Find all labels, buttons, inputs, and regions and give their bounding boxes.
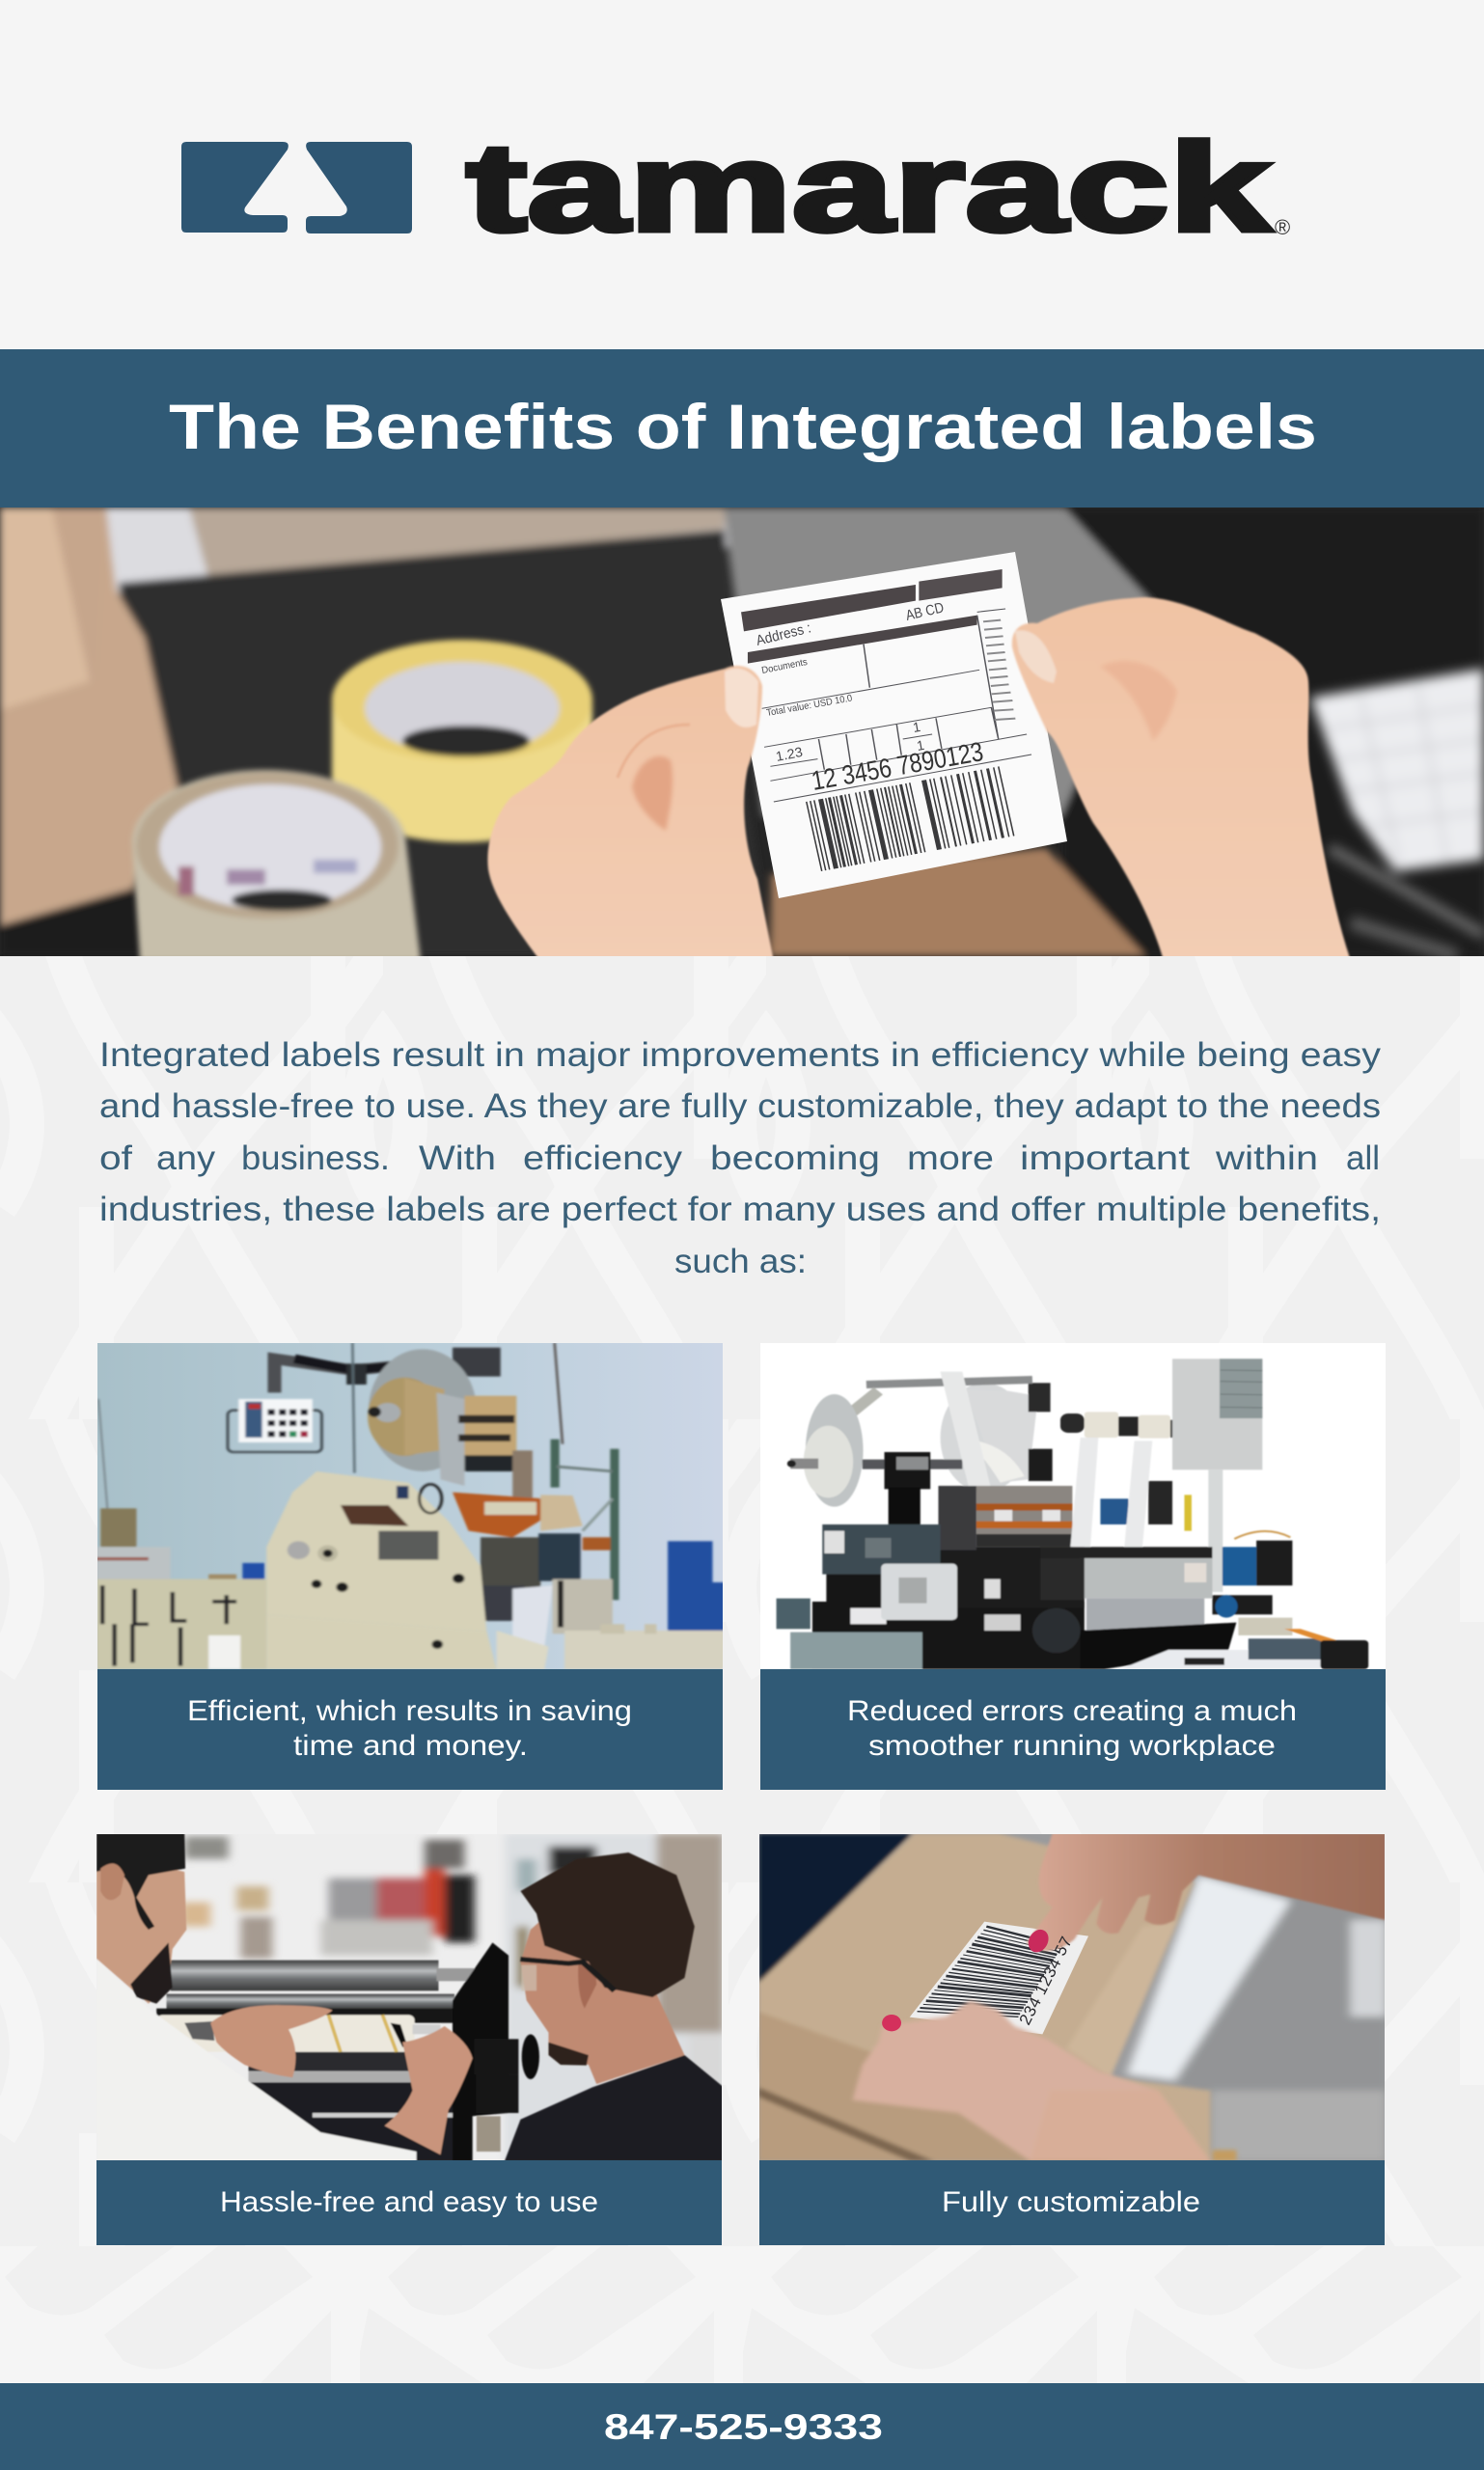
top bar: [866, 1380, 1032, 1385]
wordmark: tamarack: [466, 117, 1272, 258]
caption bar: [97, 1669, 723, 1790]
intro paragraph: within: [1215, 1139, 1318, 1177]
intro paragraph: of: [99, 1139, 132, 1177]
caption text: time and money.: [293, 1730, 528, 1762]
intro paragraph: any: [156, 1139, 216, 1177]
intro paragraph: Integrated labels result in major improvements in efficiency while being easy: [99, 1036, 1382, 1074]
intro paragraph: With: [419, 1139, 496, 1177]
blurred keyboard: [1310, 669, 1484, 956]
upper arm and hand: [1027, 1833, 1386, 1951]
photo: label press in warehouse: [96, 1343, 725, 1669]
label text: 1: [916, 737, 925, 754]
icon: clear tape roll: [132, 770, 421, 961]
hero photo: hands holding shipping label: [0, 508, 1484, 961]
card: fully customizable: [758, 1833, 1390, 2245]
control panel: [228, 1411, 321, 1452]
label text: 1.23: [775, 744, 804, 764]
label text: AB CD: [904, 599, 946, 624]
intro paragraph: industries, these labels are perfect for many uses and offer multiple benefits,: [99, 1191, 1381, 1228]
barcode digits: 234 1234 57: [1016, 1934, 1076, 2028]
caption text: Fully customizable: [942, 2186, 1200, 2218]
card: efficient: [96, 1343, 725, 1790]
background pattern panel: [0, 956, 1484, 2383]
web strip: [941, 1372, 990, 1486]
bottom right: [1120, 1650, 1320, 1669]
label text: Address :: [755, 619, 812, 649]
photo: label converting machine: [760, 1343, 1386, 1669]
left hand: [487, 666, 774, 961]
title text: The Benefits of Integrated labels: [169, 391, 1317, 462]
intro paragraph: efficiency: [523, 1139, 683, 1177]
young man in black t-shirt: [520, 1913, 684, 2084]
caption text: Hassle-free and easy to use: [220, 2186, 598, 2218]
lower hand: [852, 2000, 1210, 2161]
touch screen: [881, 1564, 957, 1620]
center machinery: [481, 1537, 540, 1589]
barcode sticker: [910, 1922, 1088, 2034]
photo: hands applying barcode label to box: [758, 1833, 1390, 2161]
caption bar: [96, 2160, 722, 2245]
label text: Documents: [760, 657, 809, 676]
caption text: smoother running workplace: [868, 1730, 1276, 1762]
blurred desk background: [0, 508, 1484, 956]
intro paragraph: important: [1020, 1139, 1190, 1177]
icon: yellow tape roll: [332, 640, 592, 842]
intro paragraph: business.: [241, 1139, 390, 1177]
orange housing: [453, 1493, 544, 1537]
left disc: [806, 1394, 864, 1507]
intro paragraph: more: [907, 1139, 994, 1177]
black frame: [453, 1942, 508, 2161]
older man in white shirt: [96, 1959, 417, 2161]
blue cabinet: [668, 1541, 712, 1639]
intro paragraph: such as:: [674, 1243, 807, 1280]
cabinet: [1172, 1358, 1262, 1469]
icon: tamarack tree mark: [181, 142, 412, 233]
racks: [610, 1449, 618, 1600]
black base behind everything: [812, 1602, 1085, 1669]
gray box: [822, 1524, 941, 1575]
rollers: [171, 1961, 438, 1990]
caption text: Efficient, which results in saving: [187, 1695, 632, 1727]
intro paragraph: becoming: [710, 1139, 880, 1177]
intro paragraph: [99, 1036, 1382, 1280]
cream press body: [266, 1471, 486, 1631]
photo: two workers at laminating rollers: [96, 1833, 728, 2161]
logo: tamarack: [181, 117, 1290, 258]
roller housing: [1081, 1553, 1212, 1599]
label text: 1: [912, 719, 921, 735]
label text: Total value: USD 10.0: [766, 693, 854, 719]
caption text: Reduced errors creating a much: [847, 1695, 1297, 1727]
phone number: 847-525-9333: [604, 2407, 883, 2447]
rear disc: [940, 1384, 1010, 1487]
blurred workshop background: [180, 1833, 728, 2161]
card: hassle-free: [96, 1833, 728, 2245]
barcode: [806, 766, 1014, 871]
white roller: [156, 2015, 415, 2052]
left machines: [100, 1508, 136, 1547]
shipping label card: [721, 552, 1067, 898]
caption text: [187, 1695, 632, 1762]
card: reduced errors: [760, 1343, 1386, 1790]
title banner: [0, 349, 1484, 508]
motors: [1223, 1547, 1256, 1585]
paper web: [512, 1585, 553, 1647]
footer bar: [0, 2383, 1484, 2470]
intro paragraph: and hassle-free to use. As they are fully customizable, they adapt to the needs: [99, 1087, 1381, 1125]
spool assembly: [1060, 1413, 1085, 1433]
right hand: [1012, 597, 1351, 961]
mid rollers: [975, 1485, 1073, 1535]
label text: 12 3456 7890123: [810, 736, 985, 796]
registered mark: ®: [1275, 215, 1290, 239]
caption bar: [760, 1669, 1386, 1790]
roll and disc: [369, 1349, 477, 1471]
caption text: [847, 1695, 1297, 1762]
intro paragraph: all: [1346, 1139, 1380, 1177]
label text: [755, 599, 985, 796]
caption bar: [759, 2160, 1385, 2245]
